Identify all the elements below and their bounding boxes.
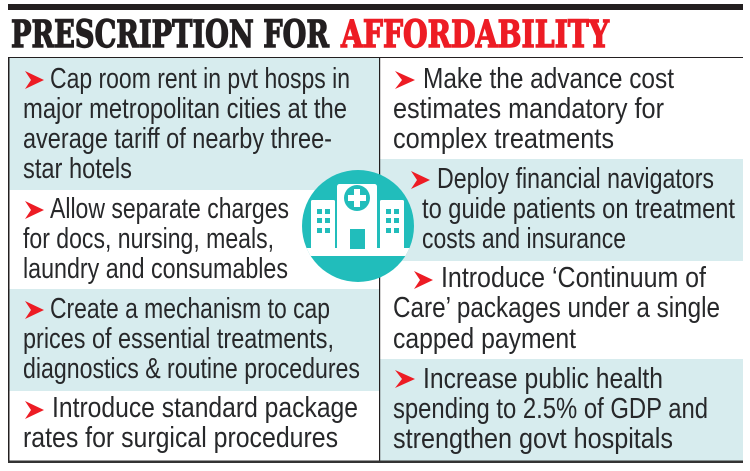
title: PRESCRIPTION FOR bbox=[11, 12, 329, 56]
text: cap prices: prices of essential treatments, bbox=[23, 323, 334, 355]
text: cap prices: Create a mechanism to cap bbox=[50, 293, 330, 325]
text: continuum of care bbox=[393, 262, 720, 355]
text: standard package rates: Introduce standard package bbox=[52, 392, 358, 424]
text: separate charges: for docs, nursing, meals, bbox=[23, 223, 274, 255]
panel: financial navigators bbox=[380, 159, 743, 261]
panel: cap prices bbox=[9, 289, 379, 391]
text: cap room rent: Cap room rent in pvt hosps in bbox=[50, 63, 350, 95]
text: financial navigators bbox=[422, 163, 735, 255]
text: cap room rent bbox=[23, 63, 350, 185]
text: continuum of care: Introduce ‘Continuum of bbox=[441, 262, 706, 294]
text: public health spending bbox=[393, 363, 708, 455]
arrow bullet bbox=[25, 71, 44, 89]
arrow bullet bbox=[395, 71, 415, 89]
text: cap prices: diagnostics & routine procedures bbox=[23, 353, 360, 385]
arrow bullet bbox=[411, 171, 430, 189]
arrow bullet bbox=[25, 301, 44, 319]
text: separate charges: laundry and consumables bbox=[23, 253, 288, 285]
text: separate charges: Allow separate charges bbox=[50, 193, 289, 225]
icon: hospital bbox=[300, 170, 416, 282]
arrow bullet bbox=[395, 370, 415, 388]
panel: public health spending bbox=[380, 359, 743, 461]
text: cap room rent: star hotels bbox=[23, 153, 132, 185]
text: separate charges bbox=[23, 193, 289, 285]
arrow bullet bbox=[25, 401, 44, 419]
text: advance cost estimates: complex treatments bbox=[393, 123, 614, 155]
panel: separate charges bbox=[9, 190, 379, 289]
panel: standard package rates bbox=[9, 391, 379, 461]
text: financial navigators: costs and insurance bbox=[422, 223, 626, 255]
text: continuum of care: capped payment bbox=[393, 323, 576, 355]
text: cap room rent: average tariff of nearby three- bbox=[23, 123, 332, 155]
title: AFFORDABILITY bbox=[340, 12, 609, 56]
text: advance cost estimates: estimates mandatory for bbox=[393, 93, 664, 125]
text: cap room rent: major metropolitan cities at the bbox=[23, 93, 347, 125]
text: public health spending: strengthen govt hospitals bbox=[393, 423, 673, 455]
text: standard package rates bbox=[23, 392, 358, 454]
text: standard package rates: rates for surgical procedures bbox=[23, 422, 338, 454]
arrow bullet bbox=[414, 271, 433, 289]
text: public health spending: Increase public health bbox=[423, 363, 663, 395]
panel: continuum of care bbox=[380, 261, 743, 359]
text: advance cost estimates: Make the advance cost bbox=[423, 63, 674, 95]
text: advance cost estimates bbox=[393, 63, 674, 155]
arrow bullet bbox=[25, 201, 44, 219]
panel: cap room rent bbox=[9, 58, 379, 190]
text: cap prices bbox=[23, 293, 360, 385]
panel: advance cost estimates bbox=[380, 58, 743, 159]
